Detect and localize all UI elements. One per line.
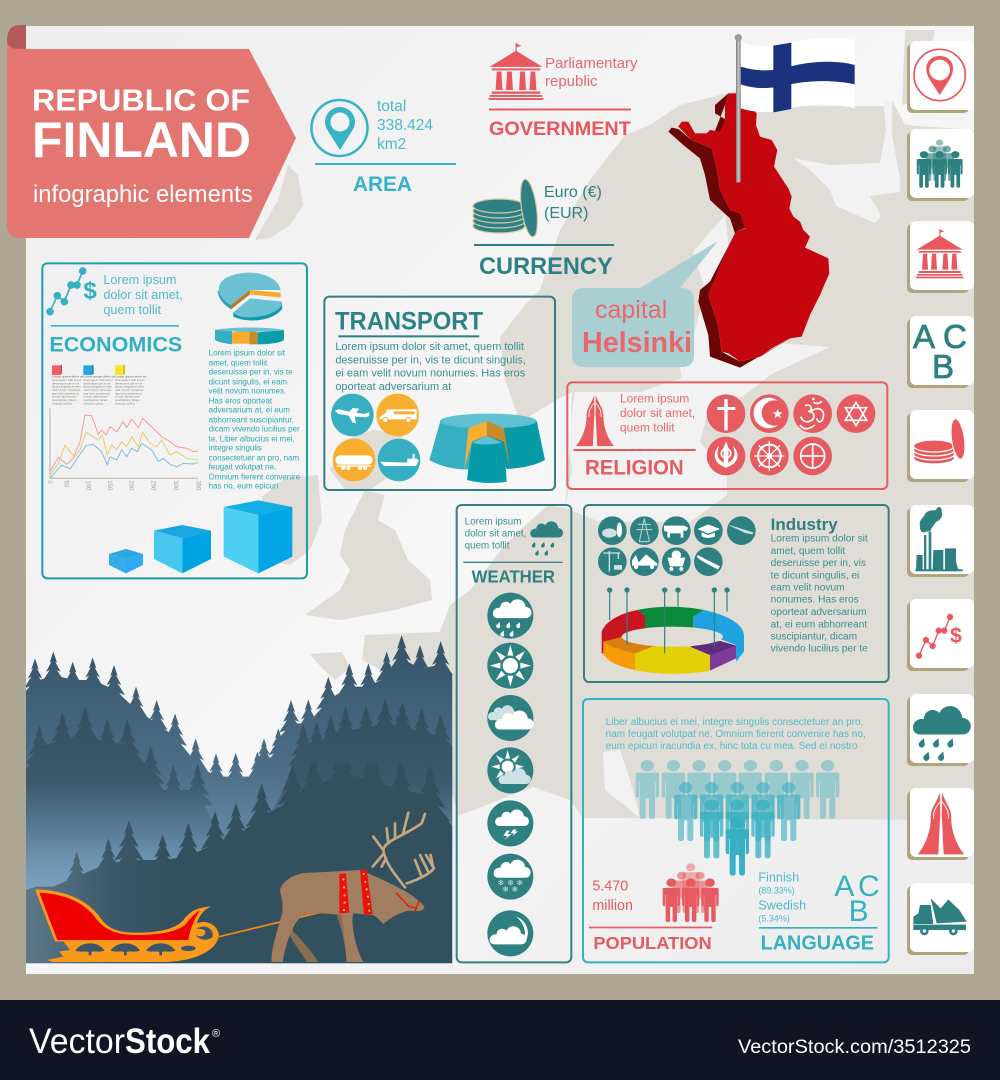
currency block	[473, 178, 614, 280]
icon: dump truck	[630, 547, 659, 576]
economics body text: integre singulis	[209, 444, 262, 453]
legend: vivendo lucilius	[83, 401, 104, 405]
tile: weather	[907, 694, 974, 766]
icon: sun cross	[793, 437, 832, 475]
icon: cross	[707, 394, 745, 433]
panel: weather: Lorem ipsum	[465, 517, 521, 528]
tile: truck	[907, 883, 974, 955]
icon: mine cart	[662, 547, 691, 576]
legend: Lorem ipsum dolor sit	[115, 375, 146, 379]
legend: suscipiantur dicam	[115, 398, 140, 402]
tile: religion	[907, 788, 974, 860]
panel: industry: at, ei eum abhorreant	[771, 619, 867, 630]
panel: economics: dolor sit amet,	[103, 288, 183, 302]
legend: suscipiantur dicam	[83, 398, 109, 402]
title banner: REPUBLIC OF	[32, 82, 250, 118]
icon: snow: ❄	[507, 878, 514, 887]
area block: km2	[377, 136, 406, 153]
icon: pylon	[630, 516, 659, 545]
government block: Parliamentary	[545, 55, 638, 72]
legend: velit novum nonumes	[83, 388, 112, 392]
economics body text: te. Liber albucius ei mei,	[209, 434, 295, 443]
legend	[52, 365, 146, 405]
panel: religion: quem tollit	[620, 421, 675, 435]
currency block: CURRENCY	[479, 254, 613, 280]
icon: thunderstorm	[487, 800, 533, 846]
icon: bus	[376, 394, 419, 436]
tile: government	[907, 221, 974, 293]
icon: snow: ❄	[502, 885, 509, 894]
panel: population and language: eum epicuri iracundia ex, hinc tota cu mea. Sed ei nostro	[606, 741, 858, 752]
icon: coins	[473, 178, 540, 238]
title banner: FINLAND	[32, 112, 251, 168]
panel: religion: dolor sit amet,	[620, 406, 695, 420]
tile: map pin	[907, 41, 974, 113]
footer logo: Vector	[29, 1022, 125, 1061]
drum chart	[429, 414, 545, 483]
icon: star of david	[837, 394, 875, 433]
icon: khanda	[707, 437, 745, 475]
line chart: 100	[84, 480, 90, 491]
icon: coins	[598, 516, 627, 545]
line chart: 350	[194, 480, 200, 491]
tile: letters: B	[932, 348, 954, 385]
panel: economics: ECONOMICS	[49, 333, 182, 357]
panel: population and language: POPULATION	[593, 933, 712, 953]
panel: industry: oporteat adversarium	[771, 607, 867, 618]
panel: transport: ei eam velit novum nonumes. Has eros	[335, 368, 526, 380]
economics body text: abhorreant suscipiantur,	[209, 415, 294, 424]
map of Europe background	[255, 30, 974, 820]
panel: population and language: nam feugait volutpat ne. Omnium fierent convenire has no,	[606, 729, 866, 740]
line chart: 150	[106, 480, 112, 491]
panel: transport: oporteat adversarium at	[335, 381, 451, 393]
icon: crescent and star	[750, 394, 789, 433]
panel: industry: deseruisse per in, vis	[771, 558, 866, 569]
icon: ABC letters: A	[834, 870, 854, 903]
footer image id: VectorStock.com/3512325	[738, 1037, 971, 1058]
panel: weather: quem tollit	[465, 540, 510, 551]
economics body text: dicunt singulis, ei eam	[209, 377, 288, 386]
economics body text: velit novum nonumes.	[209, 387, 286, 396]
panel: transport: Lorem ipsum dolor sit amet, quem tollit	[335, 341, 524, 353]
economics body text: adversarium at, ei eum	[209, 406, 290, 415]
legend: has eros oporteat at	[115, 391, 142, 395]
title banner	[7, 25, 296, 238]
economics body text: deseruisse per in, vis te	[209, 368, 293, 377]
government block	[489, 43, 638, 140]
currency block: Euro (€)	[544, 184, 602, 201]
icon: sun and cloud	[487, 747, 533, 793]
economics body text: feugait volutpat ne.	[209, 463, 276, 472]
icon: growth and dollar: $	[83, 277, 97, 304]
legend: has eros oporteat at	[52, 391, 79, 395]
panel: transport: deseruisse per in, vis te dicunt singulis,	[335, 354, 526, 366]
line chart: 300	[172, 480, 178, 491]
panel: transport: TRANSPORT	[335, 307, 483, 335]
sleigh and reindeer	[35, 813, 434, 962]
capital callout	[572, 241, 718, 367]
forest illustration	[26, 630, 452, 963]
icon: snow: ❄	[512, 885, 518, 894]
area block	[312, 98, 456, 196]
icon: praying hands	[576, 395, 614, 446]
panel: population and language	[583, 699, 889, 962]
line chart: 250	[149, 480, 155, 491]
icon: red people group	[663, 863, 719, 922]
icon: snow	[487, 854, 533, 900]
panel: industry: te dicunt singulis, ei	[771, 570, 859, 581]
area block: 338.424	[377, 117, 433, 134]
icon: om	[793, 394, 832, 433]
icon: growth and dollar	[46, 267, 97, 315]
legend: dicunt singulis ei eam	[115, 385, 144, 389]
panel: population and language: million	[592, 898, 633, 914]
legend: dicunt singulis ei eam	[83, 385, 112, 389]
icon: graduation cap	[694, 516, 723, 545]
panel: religion: RELIGION	[585, 456, 684, 479]
economics body text: Has eros oporteat	[209, 396, 273, 405]
legend: deseruisse per in vis	[52, 381, 80, 385]
currency block: (EUR)	[544, 205, 588, 222]
legend: dicunt singulis ei eam	[52, 385, 81, 389]
legend: deseruisse per in vis	[83, 381, 111, 385]
footer bar	[0, 1000, 1000, 1080]
panel: economics: quem tollit	[103, 303, 161, 317]
icon: rain	[487, 593, 533, 639]
antlers	[373, 813, 434, 887]
legend: suscipiantur dicam	[52, 398, 77, 402]
icon: sun	[487, 643, 533, 689]
3D cubes	[109, 500, 292, 573]
legend: velit novum nonumes	[115, 388, 144, 392]
title banner: infographic elements	[33, 181, 253, 208]
panel: industry: amet, quem tollit	[771, 546, 845, 557]
icon: snow: ❄	[498, 878, 504, 887]
panel: religion: Lorem ipsum	[620, 391, 689, 405]
icon: parliament	[489, 43, 543, 100]
icon: rifle	[727, 516, 756, 545]
tile: economics: $	[950, 623, 962, 647]
legend: amet quem tollit lorem	[52, 378, 82, 382]
footer logo: ®	[212, 1028, 220, 1040]
legend: deseruisse per in vis	[115, 381, 143, 385]
panel: industry: eam velit novum	[771, 583, 845, 594]
legend: ei eum abhorreant	[115, 395, 139, 399]
harness	[339, 869, 373, 915]
sidebar icon tiles	[907, 41, 974, 955]
capital callout: Helsinki	[582, 327, 692, 359]
panel: industry: suscipiantur, dicam	[771, 631, 857, 642]
icon: tanker wagon	[333, 439, 375, 481]
panel: economics	[42, 263, 307, 578]
panel: population and language: Swedish	[758, 899, 806, 913]
panel: population and language: Finnish	[758, 871, 799, 885]
line chart: 200	[128, 480, 134, 491]
panel: weather	[457, 505, 571, 962]
panel: population and language: (89.33%)	[758, 886, 795, 896]
legend: ei eum abhorreant	[83, 395, 108, 399]
panel: industry: Industry	[771, 515, 838, 534]
sleigh	[35, 889, 219, 962]
rope	[219, 902, 365, 937]
icon: rain cloud	[530, 521, 563, 556]
icon: crane and ship	[598, 547, 627, 576]
line chart: 0	[46, 480, 52, 484]
pie side view	[215, 327, 284, 344]
legend: ei eum abhorreant	[52, 395, 76, 399]
icon: syringe	[694, 547, 723, 576]
panel: religion	[567, 382, 887, 489]
panel: industry: vivendo lucilius per te	[771, 644, 868, 655]
footer logo: Stock	[125, 1022, 210, 1061]
icon: dharma wheel	[750, 437, 789, 475]
government block: republic	[545, 73, 598, 90]
icon: moon and cloud	[487, 910, 533, 956]
icon: cow	[662, 516, 691, 545]
ring chart	[602, 587, 744, 674]
footer logo	[29, 1022, 220, 1061]
government block: GOVERNMENT	[489, 118, 631, 140]
economics body text: amet, quem tollit	[209, 358, 268, 367]
panel: population and language: Liber albucius ei mei, integre singulis consectetuer an pro,	[606, 717, 863, 728]
tile: people	[907, 129, 974, 201]
reindeer	[272, 813, 434, 962]
line chart: 50	[63, 480, 69, 488]
panel: economics: Lorem ipsum	[103, 273, 176, 287]
legend: vivendo lucilius	[115, 401, 136, 405]
area block: AREA	[353, 173, 412, 196]
area block: total	[377, 98, 406, 115]
capital callout: capital	[595, 296, 667, 324]
icon: ABC letters: C	[858, 870, 880, 903]
icon: map pin	[312, 100, 368, 156]
panel: transport	[324, 297, 555, 490]
legend: Lorem ipsum dolor sit	[52, 375, 83, 379]
tile: coins	[907, 410, 974, 482]
panel: industry: nonumes. Has eros	[771, 595, 859, 606]
panel: population and language: 5.470	[592, 879, 628, 895]
economics body text: Omnium fierent convenire	[209, 472, 301, 481]
legend: has eros oporteat at	[83, 391, 110, 395]
icon: snow: ❄	[517, 878, 523, 887]
pie chart	[218, 273, 282, 320]
legend: amet quem tollit lorem	[115, 378, 145, 382]
legend: Lorem ipsum dolor sit	[83, 375, 115, 379]
panel: weather: dolor sit amet,	[465, 529, 526, 540]
economics body text: Lorem ipsum dolor sit	[209, 349, 286, 358]
legend: vivendo lucilius	[52, 401, 73, 405]
icon: ship	[378, 439, 420, 481]
panel: population and language: LANGUAGE	[761, 933, 874, 955]
panel: industry: Lorem ipsum dolor sit	[771, 534, 868, 545]
Finland map with 3D edge	[668, 34, 855, 368]
line chart	[46, 408, 200, 491]
icon: ABC letters: B	[849, 895, 869, 928]
icon: cloudy	[487, 695, 533, 741]
tile: letters: C	[943, 318, 967, 355]
panel: weather: WEATHER	[472, 567, 555, 587]
panel: industry	[584, 505, 889, 682]
tile: economics	[907, 599, 974, 671]
flag	[735, 34, 855, 182]
tile: letters	[907, 316, 974, 388]
economics body text: dicam vivendo lucilius per	[209, 425, 300, 434]
legend: amet quem tollit lorem	[83, 378, 113, 382]
economics body text: consectetuer an pro, nam	[209, 453, 300, 462]
people pyramid	[636, 760, 839, 876]
tile: industry	[907, 505, 974, 577]
legend: velit novum nonumes	[52, 388, 81, 392]
panel: population and language: (5.34%)	[758, 914, 790, 924]
economics body text: has no, eum epicuri	[209, 482, 279, 491]
tile: letters: A	[913, 318, 935, 355]
icon: airplane	[331, 394, 374, 436]
